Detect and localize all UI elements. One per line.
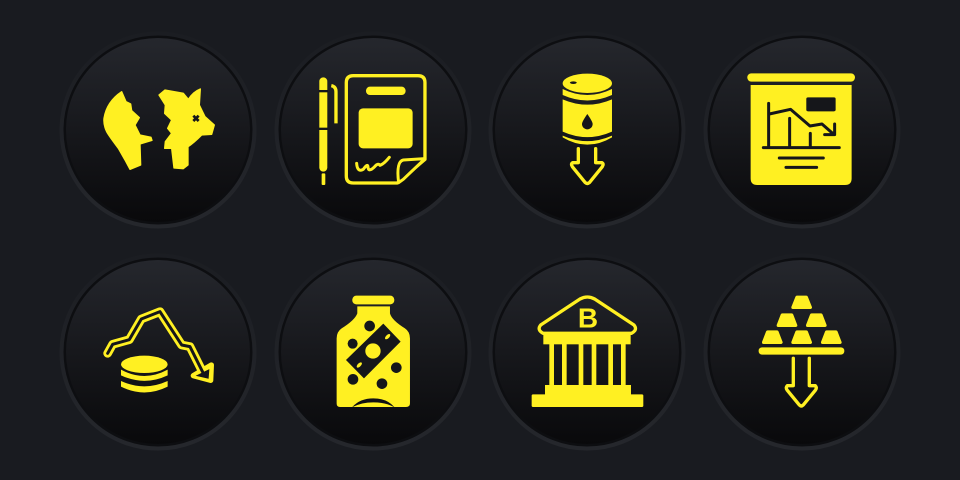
icon: gold bars price down	[759, 297, 844, 406]
button: oil barrel with down arrow	[490, 34, 684, 226]
button: bank building	[490, 256, 684, 448]
icon: bitcoin bank	[532, 297, 643, 407]
icon: presentation board with falling chart	[747, 73, 855, 185]
button: broken piggy bank	[62, 34, 254, 226]
icon: jar with banknote	[337, 296, 410, 407]
icon: contract and pen	[319, 76, 425, 185]
button: money jar	[276, 256, 470, 448]
button: coins with falling arrow	[62, 256, 254, 448]
label: B: B	[578, 303, 598, 334]
icon: broken piggy bank	[104, 89, 214, 169]
icon: oil barrel price down	[563, 74, 612, 183]
button: contract and pen	[276, 34, 470, 226]
button: gold bars with down arrow	[706, 256, 898, 448]
button: falling chart board	[706, 34, 898, 226]
icon: coins with falling arrow	[108, 312, 211, 392]
